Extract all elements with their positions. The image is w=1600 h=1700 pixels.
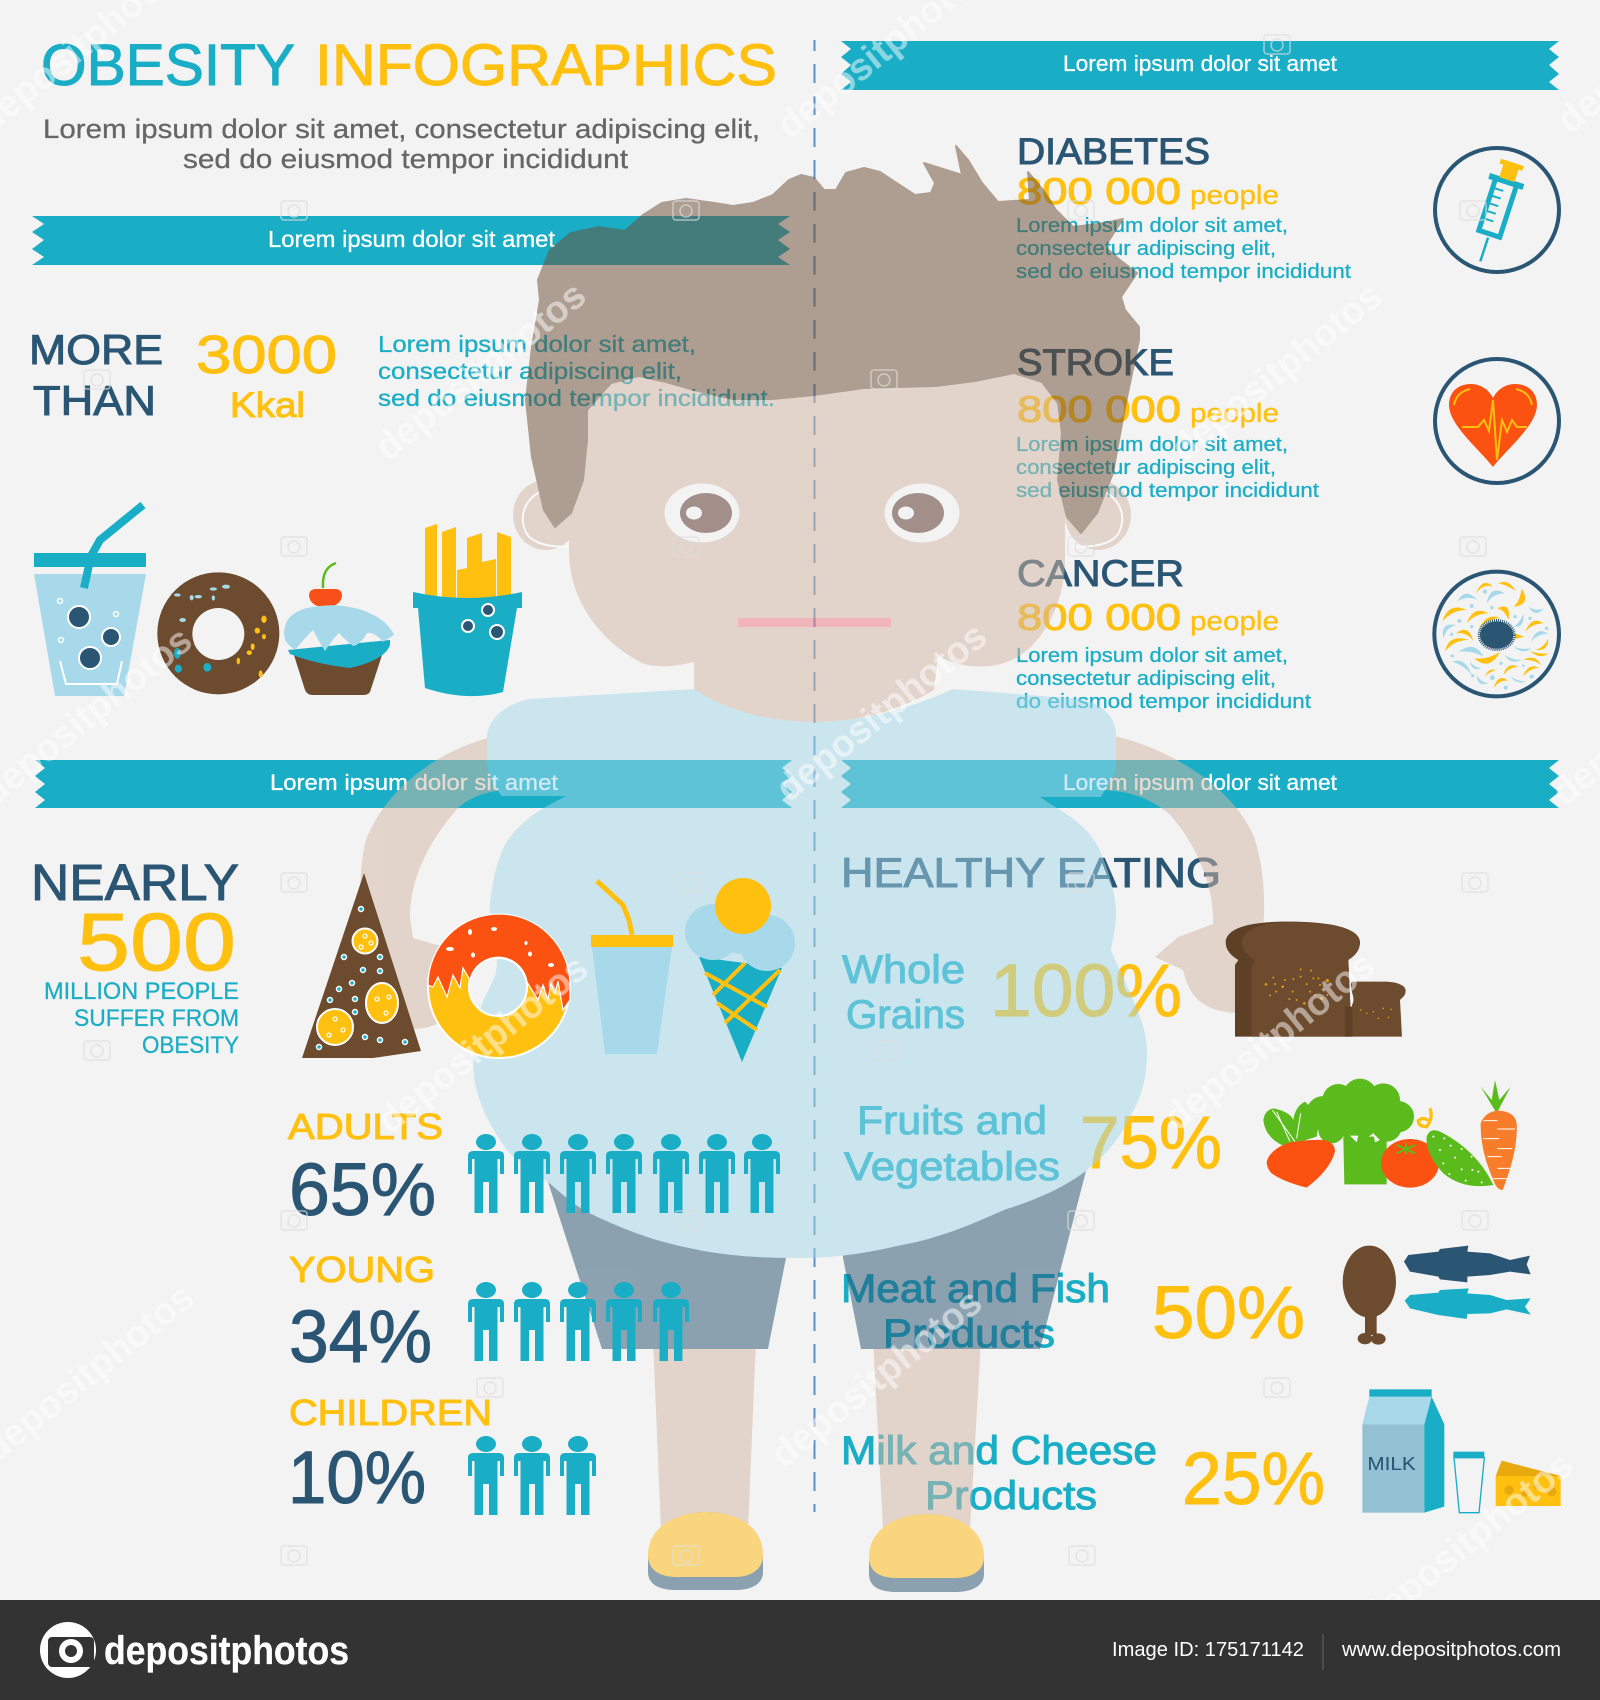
- row: meat and fish: [841, 1267, 1305, 1356]
- left arm: [360, 733, 520, 1029]
- stat: nearly 500 million: NEARLY: [31, 854, 239, 911]
- banner: lower right: [841, 760, 1559, 808]
- stat: nearly 500 million: MILLION PEOPLE: [44, 978, 239, 1005]
- icon: drink: [591, 881, 673, 1054]
- stat: nearly 500 million: SUFFER FROM: [74, 1005, 239, 1032]
- icon: french fries: [413, 524, 522, 696]
- disease: stroke text: people: [1190, 398, 1279, 428]
- disease: diabetes text: [1016, 131, 1351, 283]
- row: whole grains: 100%: [990, 949, 1182, 1032]
- disease: diabetes text: consectetur adipiscing elit,: [1016, 238, 1276, 260]
- watermarks: depositphotos: [1354, 1444, 1581, 1639]
- disease: cancer text: CANCER: [1017, 553, 1184, 594]
- icon: heart circle: [1435, 359, 1559, 483]
- icon: chocolate donut: [157, 572, 279, 694]
- stat: more than 3000 kkal: MORE: [29, 326, 163, 373]
- icon: ice cream: [685, 878, 795, 1062]
- row: meat and fish: Products: [883, 1312, 1055, 1356]
- banner: lower left: [35, 760, 792, 808]
- icon: cancer cell circle: [1434, 572, 1559, 696]
- stat: adults: ADULTS: [288, 1106, 443, 1147]
- icon: soda cup: [34, 505, 146, 696]
- row: fruits and vegetables: Fruits and: [857, 1099, 1047, 1143]
- title: OBESITY: [41, 33, 295, 98]
- disease: stroke text: consectetur adipiscing elit,: [1016, 457, 1276, 479]
- text block: calories description: consectetur adipiscing elit,: [378, 358, 682, 384]
- left eye: [664, 484, 740, 542]
- watermarks: depositphotos: [763, 1281, 990, 1476]
- disease: diabetes text: Lorem ipsum dolor sit amet,: [1016, 215, 1288, 237]
- subtitle: [43, 114, 760, 174]
- text block: calories description: sed do eiusmod tempor incididunt.: [378, 385, 775, 411]
- disease: stroke text: Lorem ipsum dolor sit amet,: [1016, 434, 1288, 456]
- watermarks: depositphotos: [1156, 944, 1383, 1139]
- right arm: [1100, 733, 1264, 1013]
- mouth: [738, 618, 891, 627]
- banner: lower right: Lorem ipsum dolor sit amet: [1063, 770, 1337, 795]
- stat: children: 10%: [288, 1436, 426, 1519]
- stat: young: YOUNG: [289, 1249, 435, 1290]
- left shoe: [648, 1512, 763, 1590]
- character: boy silhouette: [360, 146, 1264, 1592]
- watermarks: depositphotos: [768, 615, 995, 810]
- stat: young: [289, 1249, 435, 1378]
- shorts left: [548, 1150, 786, 1349]
- footer url: www.depositphotos.com: [1341, 1639, 1561, 1661]
- stat: children: CHILDREN: [289, 1392, 492, 1433]
- watermark cameras: [84, 35, 1488, 1565]
- center dashed line: [814, 40, 816, 1512]
- disease: stroke text: 800 000: [1017, 389, 1181, 430]
- disease: diabetes text: people: [1190, 180, 1279, 210]
- footer logo: depositphotos: [104, 1629, 349, 1673]
- title: [41, 33, 777, 98]
- stat: adults: [288, 1106, 443, 1231]
- stat: children: [288, 1392, 492, 1519]
- shirt: [473, 689, 1147, 1258]
- text block: calories description: [378, 331, 775, 411]
- row: whole grains: [842, 948, 1182, 1037]
- icon: milk carton: MILK: [1367, 1453, 1416, 1474]
- heading: healthy eating: HEALTHY EATING: [841, 849, 1221, 896]
- stat: more than 3000 kkal: THAN: [33, 377, 156, 424]
- banner: top left: Lorem ipsum dolor sit amet: [268, 226, 556, 252]
- footer logo: [40, 1622, 349, 1678]
- watermarks: depositphotos: [367, 274, 594, 469]
- disease: diabetes text: DIABETES: [1017, 131, 1210, 172]
- icon: pizza slice: [302, 873, 421, 1058]
- stat: more than 3000 kkal: 3000: [196, 325, 337, 385]
- disease: cancer text: [1016, 553, 1311, 713]
- stat: adults: 65%: [289, 1148, 436, 1231]
- icon: cupcake: [284, 563, 394, 695]
- icon: navy fish: [1404, 1246, 1531, 1282]
- hair: [526, 146, 1139, 533]
- icon: glazed donut: [428, 914, 570, 1058]
- icon: glass of milk: [1453, 1452, 1484, 1513]
- banner: top right: [841, 41, 1559, 90]
- disease: cancer text: people: [1190, 606, 1279, 636]
- right ear: [1065, 480, 1131, 550]
- icon: milk carton: [1362, 1389, 1444, 1513]
- stat: young: 34%: [289, 1295, 432, 1378]
- icon: syringe circle: [1435, 148, 1559, 272]
- disease: cancer text: 800 000: [1017, 597, 1181, 638]
- disease: cancer text: Lorem ipsum dolor sit amet,: [1016, 645, 1288, 667]
- row: meat and fish: 50%: [1152, 1271, 1305, 1354]
- row: whole grains: Grains: [846, 993, 965, 1037]
- disease: stroke text: [1016, 342, 1319, 502]
- people: children: [468, 1436, 596, 1515]
- row: milk and cheese: Milk and Cheese: [841, 1429, 1157, 1473]
- title: INFOGRAPHICS: [315, 33, 777, 98]
- left leg: [653, 1340, 756, 1530]
- left ear: [513, 480, 579, 550]
- watermarks: depositphotos: [1163, 275, 1390, 470]
- row: milk and cheese: Products: [925, 1474, 1097, 1518]
- subtitle: sed do eiusmod tempor incididunt: [183, 144, 629, 174]
- banner: lower left: Lorem ipsum dolor sit amet: [270, 770, 558, 795]
- icon: vegetables: [1263, 1079, 1517, 1190]
- disease: stroke text: STROKE: [1017, 342, 1174, 383]
- disease: diabetes text: sed do eiusmod tempor incididunt: [1016, 261, 1351, 283]
- stat: nearly 500 million: OBESITY: [142, 1032, 239, 1059]
- stat: nearly 500 million: 500: [77, 897, 236, 988]
- disease: cancer text: do eiusmod tempor incididunt: [1016, 691, 1311, 713]
- right leg: [873, 1340, 981, 1530]
- row: fruits and vegetables: Vegetables: [844, 1145, 1060, 1189]
- people: young: [468, 1282, 689, 1361]
- footer image id: Image ID: 175171142: [1112, 1639, 1304, 1661]
- row: meat and fish: Meat and Fish: [841, 1267, 1110, 1311]
- stat: nearly 500 million: [31, 854, 239, 1059]
- row: fruits and vegetables: [844, 1099, 1222, 1189]
- banner: top right: Lorem ipsum dolor sit amet: [1063, 51, 1337, 76]
- shorts right: [843, 1150, 1086, 1349]
- icon: bread: [1226, 922, 1406, 1037]
- row: fruits and vegetables: 75%: [1080, 1101, 1222, 1184]
- row: milk and cheese: 25%: [1182, 1437, 1325, 1520]
- icon: teal fish: [1405, 1288, 1531, 1319]
- disease: cancer text: consectetur adipiscing elit,: [1016, 668, 1276, 690]
- stat: more than 3000 kkal: [29, 325, 337, 425]
- disease: stroke text: sed eiusmod tempor incididunt: [1016, 480, 1319, 502]
- footer bar: [0, 1600, 1600, 1700]
- banner: top left: [32, 216, 790, 265]
- row: whole grains: Whole: [842, 948, 965, 992]
- right shoe: [869, 1514, 984, 1592]
- icon: chicken leg: [1343, 1246, 1396, 1345]
- text block: calories description: Lorem ipsum dolor sit amet,: [378, 331, 696, 357]
- disease: diabetes text: 800 000: [1017, 171, 1181, 212]
- row: milk and cheese: [841, 1429, 1325, 1520]
- face and neck: [569, 370, 1065, 722]
- icon: cheese: [1496, 1461, 1561, 1506]
- people: adults: [468, 1134, 780, 1213]
- watermarks: depositphotos: [369, 947, 596, 1142]
- stat: more than 3000 kkal: Kkal: [230, 386, 305, 425]
- subtitle: Lorem ipsum dolor sit amet, consectetur adipiscing elit,: [43, 114, 760, 144]
- right eye: [884, 484, 960, 542]
